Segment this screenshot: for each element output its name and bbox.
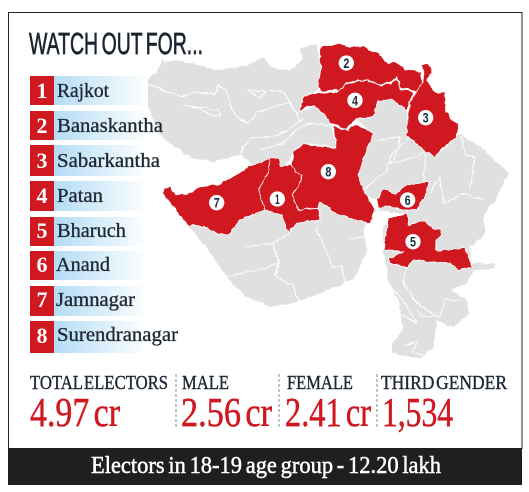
map: badge numbers: 8 [325, 164, 332, 180]
row 1: Rajkot [57, 80, 109, 102]
map of Gujarat [145, 44, 508, 358]
row 7: Jamnagar [56, 289, 135, 311]
row 6: Anand [56, 254, 110, 276]
district 7: Jamnagar [163, 159, 270, 235]
district 2: Banaskantha [318, 44, 422, 92]
row 7: 7 [36, 287, 48, 312]
stat: female [285, 372, 371, 435]
row 5 [30, 217, 148, 246]
district 1: Rajkot [258, 158, 320, 232]
stat: male [181, 372, 272, 435]
footer band [8, 448, 522, 485]
map: badge numbers: 1 [275, 191, 280, 207]
district 5: Bharuch [383, 213, 473, 270]
map: badge numbers: 6 [405, 192, 411, 208]
map: badge numbers: 5 [410, 234, 416, 250]
row 3: 3 [36, 148, 48, 173]
footer band: Electors in 18-19 age group - 12.20 lakh [91, 453, 441, 479]
row 2 [30, 111, 163, 140]
row 6 [30, 251, 148, 280]
stat: male: 2.56 cr [181, 389, 272, 435]
map: grey districts [145, 44, 508, 358]
map: badge numbers: 3 [423, 110, 429, 126]
row 3: Sabarkantha [57, 150, 160, 172]
stat: third gender [381, 372, 508, 435]
district 8: Surendranagar [290, 124, 375, 223]
stat: female: 2.41 cr [285, 389, 371, 435]
stat: third gender: THIRD GENDER [381, 372, 508, 394]
district 4: Patan [300, 78, 414, 130]
row 8 [30, 321, 178, 353]
map: badge numbers: 4 [352, 92, 358, 108]
row 1: 1 [36, 78, 48, 103]
stat: total electors: TOTAL ELECTORS [30, 372, 168, 394]
row 4 [30, 181, 148, 211]
row 8: Surendranagar [57, 324, 178, 346]
row 5: Bharuch [57, 220, 126, 242]
row 5: 5 [36, 218, 48, 243]
list: districts to watch [30, 76, 178, 353]
row 8: 8 [36, 323, 48, 348]
stat: male: MALE [182, 372, 229, 394]
row 1 [30, 76, 148, 105]
row 7 [30, 286, 148, 316]
map: white district boundaries [148, 85, 483, 355]
stat: female: FEMALE [287, 372, 353, 394]
stat: third gender: 1,534 [382, 389, 453, 435]
stat: total electors: 4.97 cr [30, 389, 120, 435]
district 3: Sabarkantha [407, 63, 459, 157]
map: badge numbers: 2 [343, 55, 350, 71]
row 6: 6 [36, 252, 48, 277]
map: badge numbers: 7 [214, 195, 220, 211]
map: badge numbers [214, 55, 429, 250]
row 4: Patan [57, 185, 103, 207]
map: number badges [209, 55, 433, 249]
stat dividers [176, 374, 377, 428]
district 6: Anand [377, 182, 429, 210]
row 4: 4 [36, 183, 48, 208]
map: highlighted red districts [163, 44, 473, 270]
stat: total electors [30, 372, 168, 435]
row 2: 2 [36, 113, 48, 138]
row 3 [30, 145, 160, 176]
row 2: Banaskantha [57, 115, 163, 137]
title: WATCH OUT FOR... [29, 26, 203, 61]
